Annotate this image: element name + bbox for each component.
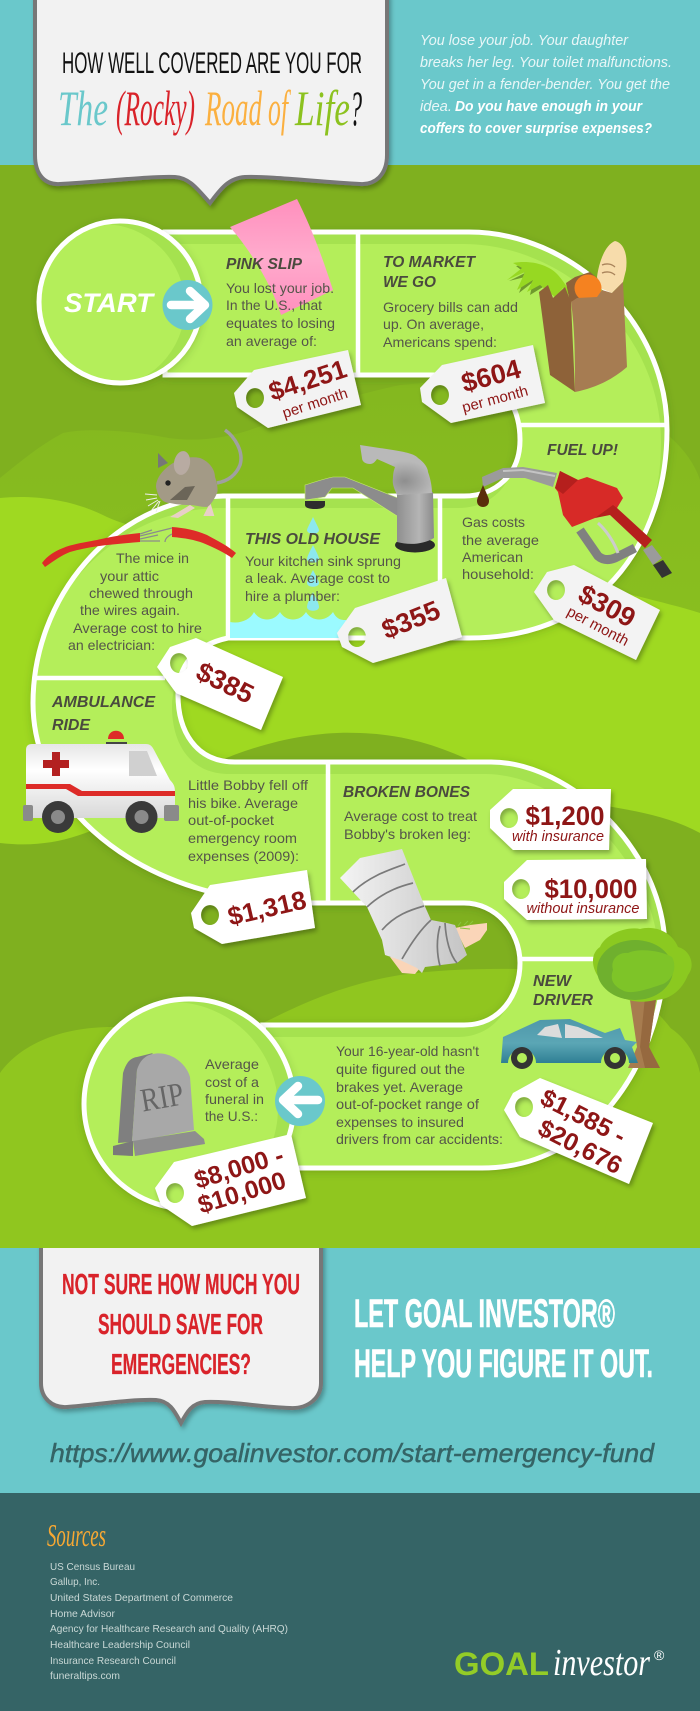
text: broken bones: BROKEN BONES <box>343 784 470 801</box>
text: new driver: DRIVER <box>533 992 593 1009</box>
price tag: emergency room: $1,318 <box>225 884 309 932</box>
text: pink slip: an average of: <box>226 333 317 349</box>
text: to market we go: Grocery bills can add <box>383 299 518 315</box>
text: to market we go: Americans spend: <box>383 334 497 350</box>
url: https://www.goalinvestor.com/start-emergency-fund <box>50 1438 656 1468</box>
text: ambulance ride <box>51 694 308 864</box>
intro paragraph: You lose your job. Your daughter <box>420 33 629 49</box>
sources list: US Census Bureau <box>50 1561 135 1573</box>
price tag: electrician: $385 <box>191 656 259 710</box>
price tag: with insurance <box>490 789 611 850</box>
icon: tombstone <box>113 1053 205 1156</box>
speech bubble: title <box>35 0 387 203</box>
sources list: funeraltips.com <box>50 1670 120 1682</box>
text: pink slip: PINK SLIP <box>226 256 302 273</box>
price tag: pink slip <box>234 350 361 428</box>
text: funeral: Average <box>205 1056 259 1072</box>
price tag: electrician <box>157 638 283 730</box>
start circle <box>21 221 201 388</box>
price tag: groceries: per month <box>460 383 530 416</box>
text: to market we go: TO MARKET <box>383 254 476 271</box>
price tag: pink slip: per month <box>280 385 350 422</box>
price tag: groceries <box>420 345 545 423</box>
text: new driver: drivers from car accidents: <box>336 1131 503 1147</box>
water at bottom of old house box <box>230 612 346 638</box>
text: fuel up <box>462 442 619 582</box>
icon: faucet <box>305 445 435 552</box>
text: mice electrician: The mice in <box>116 550 189 566</box>
sources list: United States Department of Commerce <box>50 1592 233 1604</box>
text: ambulance ride: his bike. Average <box>188 795 298 811</box>
text: broken bones: Bobby's broken leg: <box>344 826 471 842</box>
intro paragraph: You get in a fender-bender. You get the <box>420 77 670 93</box>
icon: tombstone: RIP <box>138 1077 186 1119</box>
background: teal header <box>0 0 700 165</box>
text: fuel up: Gas costs <box>462 514 525 530</box>
speech bubble: savings question: NOT SURE HOW MUCH YOU <box>62 1269 300 1301</box>
price tag: with insurance: $1,200 <box>526 801 604 831</box>
text: broken bones <box>343 784 477 842</box>
sources list: Home Advisor <box>50 1608 115 1620</box>
price tag: car accidents: $1,585 - <box>536 1084 630 1150</box>
footer band <box>0 1493 700 1711</box>
call to action band <box>0 1248 700 1493</box>
text: to market we go: up. On average, <box>383 316 484 332</box>
sources heading: Sources <box>47 1517 106 1553</box>
title line 2: Road <box>204 80 263 136</box>
text: this old house <box>245 531 401 604</box>
text: funeral <box>205 1056 264 1124</box>
icon: grocery bag <box>507 241 627 392</box>
text: broken bones: Average cost to treat <box>344 808 477 824</box>
text: new driver: Your 16-year-old hasn't <box>336 1043 479 1059</box>
title line 2: Life <box>294 80 350 136</box>
speech bubble: savings question: SHOULD SAVE FOR <box>98 1309 263 1341</box>
icon: chewed wire <box>42 527 236 567</box>
price tag: pink slip: $4,251 <box>265 353 350 407</box>
text: this old house: hire a plumber: <box>245 588 340 604</box>
text: ambulance ride: Little Bobby fell off <box>188 777 308 793</box>
sources list: Healthcare Leadership Council <box>50 1639 190 1651</box>
icon: crashed car <box>501 1019 638 1069</box>
price tag: emergency room <box>191 870 315 944</box>
heading: let goal investor <box>354 1292 653 1386</box>
text: this old house: a leak. Average cost to <box>245 570 390 586</box>
price tag: funeral <box>155 1134 306 1226</box>
text: ambulance ride: expenses (2009): <box>188 848 299 864</box>
price tag: without insurance: $10,000 <box>544 874 638 904</box>
sources list <box>50 1561 288 1682</box>
text: ambulance ride: AMBULANCE <box>51 694 156 711</box>
icon: pink slip <box>230 199 333 315</box>
title line 2: (Rocky) <box>116 80 195 136</box>
price tag: car accidents <box>504 1078 653 1184</box>
speech bubble: title: ? <box>350 80 362 136</box>
text: fuel up: FUEL UP! <box>547 442 619 459</box>
intro paragraph <box>420 33 672 137</box>
text: mice electrician: the wires again. <box>80 602 180 618</box>
text: mice electrician: chewed through <box>89 585 193 601</box>
speech bubble: savings question <box>41 1230 321 1423</box>
logo: goal investor: ® <box>654 1647 665 1663</box>
text: new driver <box>336 973 593 1147</box>
price tag: with insurance: with insurance <box>512 828 604 845</box>
icon: back arrow <box>275 1076 325 1126</box>
text: mice electrician: an electrician: <box>68 637 155 653</box>
price tag: funeral: $8,000 - <box>191 1141 287 1195</box>
intro paragraph: coffers to cover surprise expenses? <box>420 121 652 137</box>
price tag: plumber <box>337 578 462 663</box>
title line 1: HOW WELL COVERED ARE YOU FOR <box>62 47 362 80</box>
text: pink slip: You lost your job. <box>226 280 334 296</box>
start circle: START <box>64 288 156 318</box>
sources list: Insurance Research Council <box>50 1655 176 1667</box>
icon: mouse <box>145 430 241 518</box>
finish circle <box>66 999 294 1214</box>
price tag: without insurance: without insurance <box>526 900 640 917</box>
icon: start arrow <box>162 280 212 330</box>
text: to market we go <box>383 254 518 350</box>
text: ambulance ride: RIDE <box>52 717 91 734</box>
price tag: groceries: $604 <box>458 354 524 398</box>
logo: goal investor <box>454 1642 665 1684</box>
price tag: gas: per month <box>564 603 632 650</box>
price tag: without insurance <box>504 859 647 920</box>
text: pink slip: equates to losing <box>226 315 335 331</box>
speech bubble: savings question: EMERGENCIES? <box>111 1349 251 1381</box>
text: fuel up: American <box>462 549 523 565</box>
intro paragraph: idea. <box>420 99 452 115</box>
text: ambulance ride: emergency room <box>188 830 297 846</box>
text: new driver: quite figured out the <box>336 1061 465 1077</box>
text: pink slip <box>226 256 335 349</box>
icon: ambulance <box>23 731 179 833</box>
text: new driver: brakes yet. Average <box>336 1079 463 1095</box>
text: funeral: cost of a <box>205 1074 259 1090</box>
text: new driver: expenses to insured <box>336 1114 464 1130</box>
logo: goal investor: investor <box>553 1642 650 1684</box>
text: mice electrician: Average cost to hire <box>73 620 202 636</box>
logo: goal investor: GOAL <box>454 1646 549 1682</box>
intro paragraph: Do you have enough in your <box>455 99 643 115</box>
text: this old house: Your kitchen sink sprung <box>245 553 401 569</box>
game board road <box>27 232 667 1180</box>
text: new driver: NEW <box>533 973 573 990</box>
sources list: Gallup, Inc. <box>50 1576 100 1588</box>
title line 2: of <box>268 80 291 136</box>
title line 2: The <box>58 80 108 136</box>
price tag: car accidents: $20,676 <box>533 1114 627 1180</box>
text: this old house: THIS OLD HOUSE <box>245 531 381 548</box>
icon: tree <box>593 928 692 1068</box>
text: fuel up: household: <box>462 566 534 582</box>
text: pink slip: In the U.S., that <box>226 297 322 313</box>
icon: gas nozzle <box>477 467 672 578</box>
icon: water drops <box>307 517 319 611</box>
text: mice electrician: your attic <box>100 568 159 584</box>
price tag: funeral: $10,000 <box>195 1166 289 1220</box>
price tag: plumber: $355 <box>378 595 444 645</box>
text: new driver: out-of-pocket range of <box>336 1096 479 1112</box>
icon: leg cast <box>340 849 487 974</box>
text: mice electrician <box>68 550 202 653</box>
background: green hills <box>0 165 700 1248</box>
text: to market we go: WE GO <box>383 274 437 291</box>
text: fuel up: the average <box>462 532 539 548</box>
text: ambulance ride: out-of-pocket <box>188 812 274 828</box>
price tag: gas: $309 <box>573 579 641 633</box>
text: funeral: the U.S.: <box>205 1108 258 1124</box>
title line 2 <box>58 80 362 136</box>
price tag: gas <box>534 565 660 660</box>
text: funeral: funeral in <box>205 1091 264 1107</box>
sources list: Agency for Healthcare Research and Quality (AHRQ) <box>50 1623 288 1635</box>
intro paragraph: breaks her leg. Your toilet malfunctions. <box>420 55 672 71</box>
